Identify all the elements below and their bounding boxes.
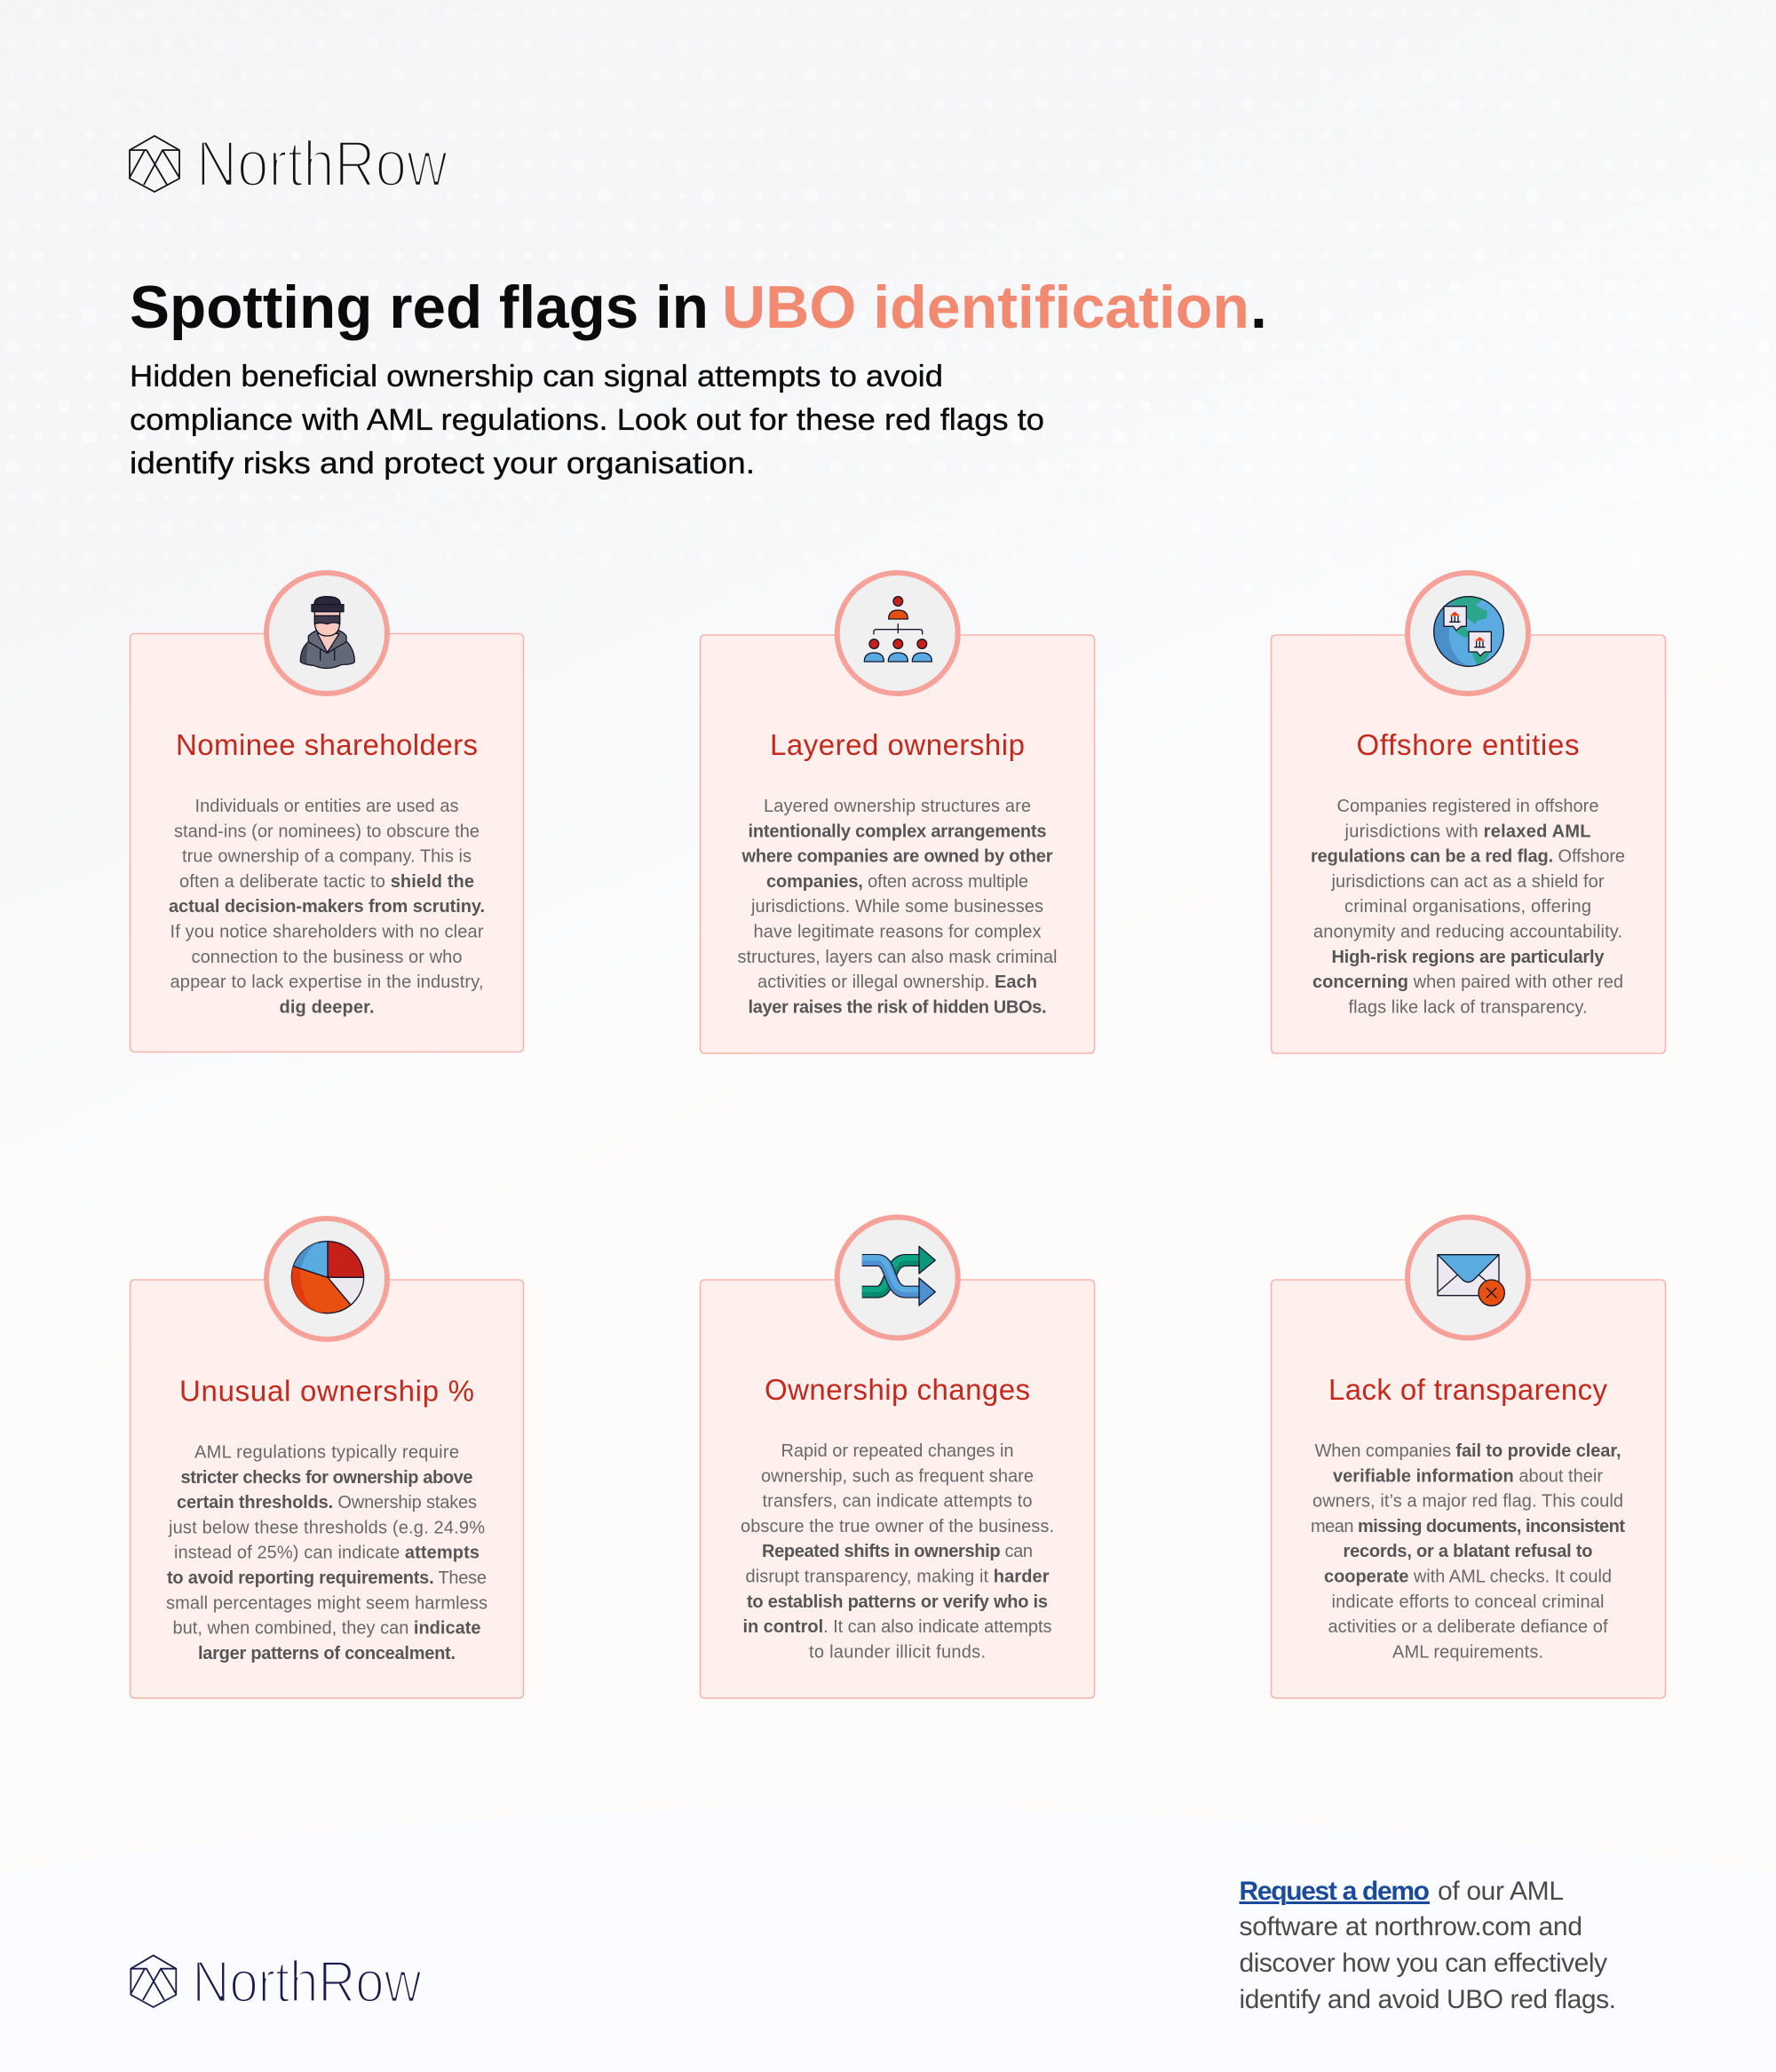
body text xyxy=(741,1441,1054,1662)
body text: obscure the true owner of the business. xyxy=(741,1517,1054,1536)
body text: concerning when paired with other red xyxy=(1312,972,1623,992)
title xyxy=(130,274,1267,341)
body text: true ownership of a company. This is xyxy=(182,847,472,867)
panel: nominee shareholders xyxy=(130,573,524,1052)
body text: flags like lack of transparency. xyxy=(1348,997,1588,1017)
body text: companies, often across multiple xyxy=(766,872,1028,892)
call to action text: discover how you can effectively xyxy=(1240,1949,1607,1978)
body text: jurisdictions. While some businesses xyxy=(750,897,1043,917)
body text: transfers, can indicate attempts to xyxy=(762,1492,1032,1512)
intro text: compliance with AML regulations. Look out for these red flags to xyxy=(130,403,1044,437)
body text: but, when combined, they can indicate xyxy=(172,1619,481,1639)
body text: stricter checks for ownership above xyxy=(181,1468,472,1488)
logo: NorthRow footer xyxy=(131,1949,422,2014)
icon: pie chart xyxy=(266,1219,387,1339)
body text: jurisdictions with relaxed AML xyxy=(1344,822,1591,841)
heading: Layered ownership xyxy=(770,728,1025,761)
body text: to launder illicit funds. xyxy=(809,1642,986,1662)
body text xyxy=(737,797,1057,1017)
body text xyxy=(1311,797,1625,1017)
body text xyxy=(1311,1441,1625,1662)
body text: indicate efforts to conceal criminal xyxy=(1332,1592,1604,1612)
heading: Ownership changes xyxy=(765,1373,1030,1406)
body text: ownership, such as frequent share xyxy=(761,1466,1034,1486)
body text: to avoid reporting requirements. These xyxy=(167,1568,487,1588)
body text: criminal organisations, offering xyxy=(1344,897,1591,917)
body text: just below these thresholds (e.g. 24.9% xyxy=(168,1518,485,1537)
body text: anonymity and reducing accountability. xyxy=(1313,922,1622,941)
icon: globe with banks xyxy=(1407,573,1528,694)
logo wordmark: NorthRow xyxy=(192,1949,422,2014)
body text: actual decision-makers from scrutiny. xyxy=(169,897,485,917)
link: request a demo: Request a demo xyxy=(1240,1877,1430,1906)
title: Spotting red flags in xyxy=(130,274,709,341)
body text: where companies are owned by other xyxy=(741,847,1053,867)
body text: mean missing documents, inconsistent xyxy=(1311,1517,1625,1536)
body text: If you notice shareholders with no clear xyxy=(170,922,484,941)
body text: records, or a blatant refusal to xyxy=(1343,1542,1593,1561)
body text: disrupt transparency, making it harder xyxy=(746,1567,1050,1586)
body text: activities or a deliberate defiance of xyxy=(1328,1617,1608,1637)
body text: stand-ins (or nominees) to obscure the xyxy=(174,822,480,841)
body text: small percentages might seem harmless xyxy=(166,1593,488,1613)
body text: in control. It can also indicate attempts xyxy=(742,1617,1051,1637)
call to action text: of our AML xyxy=(1438,1877,1564,1906)
logo: NorthRow header xyxy=(130,129,448,201)
body text: AML requirements. xyxy=(1392,1642,1543,1662)
icon: hexagon logo mark xyxy=(131,1956,176,2007)
body text: dig deeper. xyxy=(279,997,375,1017)
call to action text: software at northrow.com and xyxy=(1240,1912,1582,1941)
body text: When companies fail to provide clear, xyxy=(1314,1441,1621,1461)
body text: Repeated shifts in ownership can xyxy=(762,1542,1033,1561)
body text: verifiable information about their xyxy=(1333,1466,1603,1486)
heading: Offshore entities xyxy=(1357,728,1579,761)
body text: structures, layers can also mask criminal xyxy=(737,948,1057,967)
panel: layered ownership xyxy=(700,573,1094,1053)
call to action text: identify and avoid UBO red flags. xyxy=(1240,1985,1616,2014)
icon: organisation hierarchy xyxy=(837,573,958,694)
body text: High-risk regions are particularly xyxy=(1332,948,1605,967)
body text: intentionally complex arrangements xyxy=(748,822,1046,841)
body text: often a deliberate tactic to shield the xyxy=(179,872,474,892)
body text: Rapid or repeated changes in xyxy=(781,1441,1014,1461)
intro text: identify risks and protect your organisation. xyxy=(130,447,755,480)
body text: regulations can be a red flag. Offshore xyxy=(1311,847,1625,867)
panel: unusual ownership xyxy=(130,1219,524,1698)
body text: AML regulations typically require xyxy=(194,1442,459,1462)
body text: instead of 25%) can indicate attempts xyxy=(174,1544,480,1563)
body text: layer raises the risk of hidden UBOs. xyxy=(748,997,1046,1017)
body text: appear to lack expertise in the industry, xyxy=(170,972,483,992)
body text: owners, it’s a major red flag. This could xyxy=(1312,1492,1623,1512)
logo wordmark: NorthRow xyxy=(196,129,448,201)
icon: hexagon logo mark xyxy=(130,136,179,192)
body text: have legitimate reasons for complex xyxy=(753,922,1041,941)
body text: to establish patterns or verify who is xyxy=(747,1592,1048,1612)
heading: Unusual ownership % xyxy=(179,1375,474,1407)
title: . xyxy=(1250,274,1267,341)
body text xyxy=(169,797,485,1017)
body text: activities or illegal ownership. Each xyxy=(757,972,1037,992)
body text: Companies registered in offshore xyxy=(1337,797,1598,816)
body text: connection to the business or who xyxy=(192,948,462,967)
panel: ownership changes xyxy=(700,1217,1094,1698)
body text xyxy=(166,1442,488,1663)
title: UBO identification xyxy=(722,274,1249,341)
body text: larger patterns of concealment. xyxy=(198,1644,456,1663)
body text: Layered ownership structures are xyxy=(764,797,1031,816)
body text: jurisdictions can act as a shield for xyxy=(1330,872,1605,892)
panel: offshore entities xyxy=(1272,573,1666,1053)
intro text xyxy=(130,360,1044,480)
icon: crossing arrows xyxy=(837,1217,958,1338)
icon: masked figure xyxy=(266,573,387,694)
icon: envelope with cross xyxy=(1407,1217,1528,1338)
call to action text xyxy=(1240,1877,1616,2014)
heading: Lack of transparency xyxy=(1328,1373,1607,1406)
body text: Individuals or entities are used as xyxy=(195,797,458,816)
body text: certain thresholds. Ownership stakes xyxy=(177,1493,477,1512)
heading: Nominee shareholders xyxy=(176,728,478,761)
panel: lack of transparency xyxy=(1272,1217,1666,1698)
body text: cooperate with AML checks. It could xyxy=(1324,1567,1612,1586)
intro text: Hidden beneficial ownership can signal attempts to avoid xyxy=(130,360,943,393)
